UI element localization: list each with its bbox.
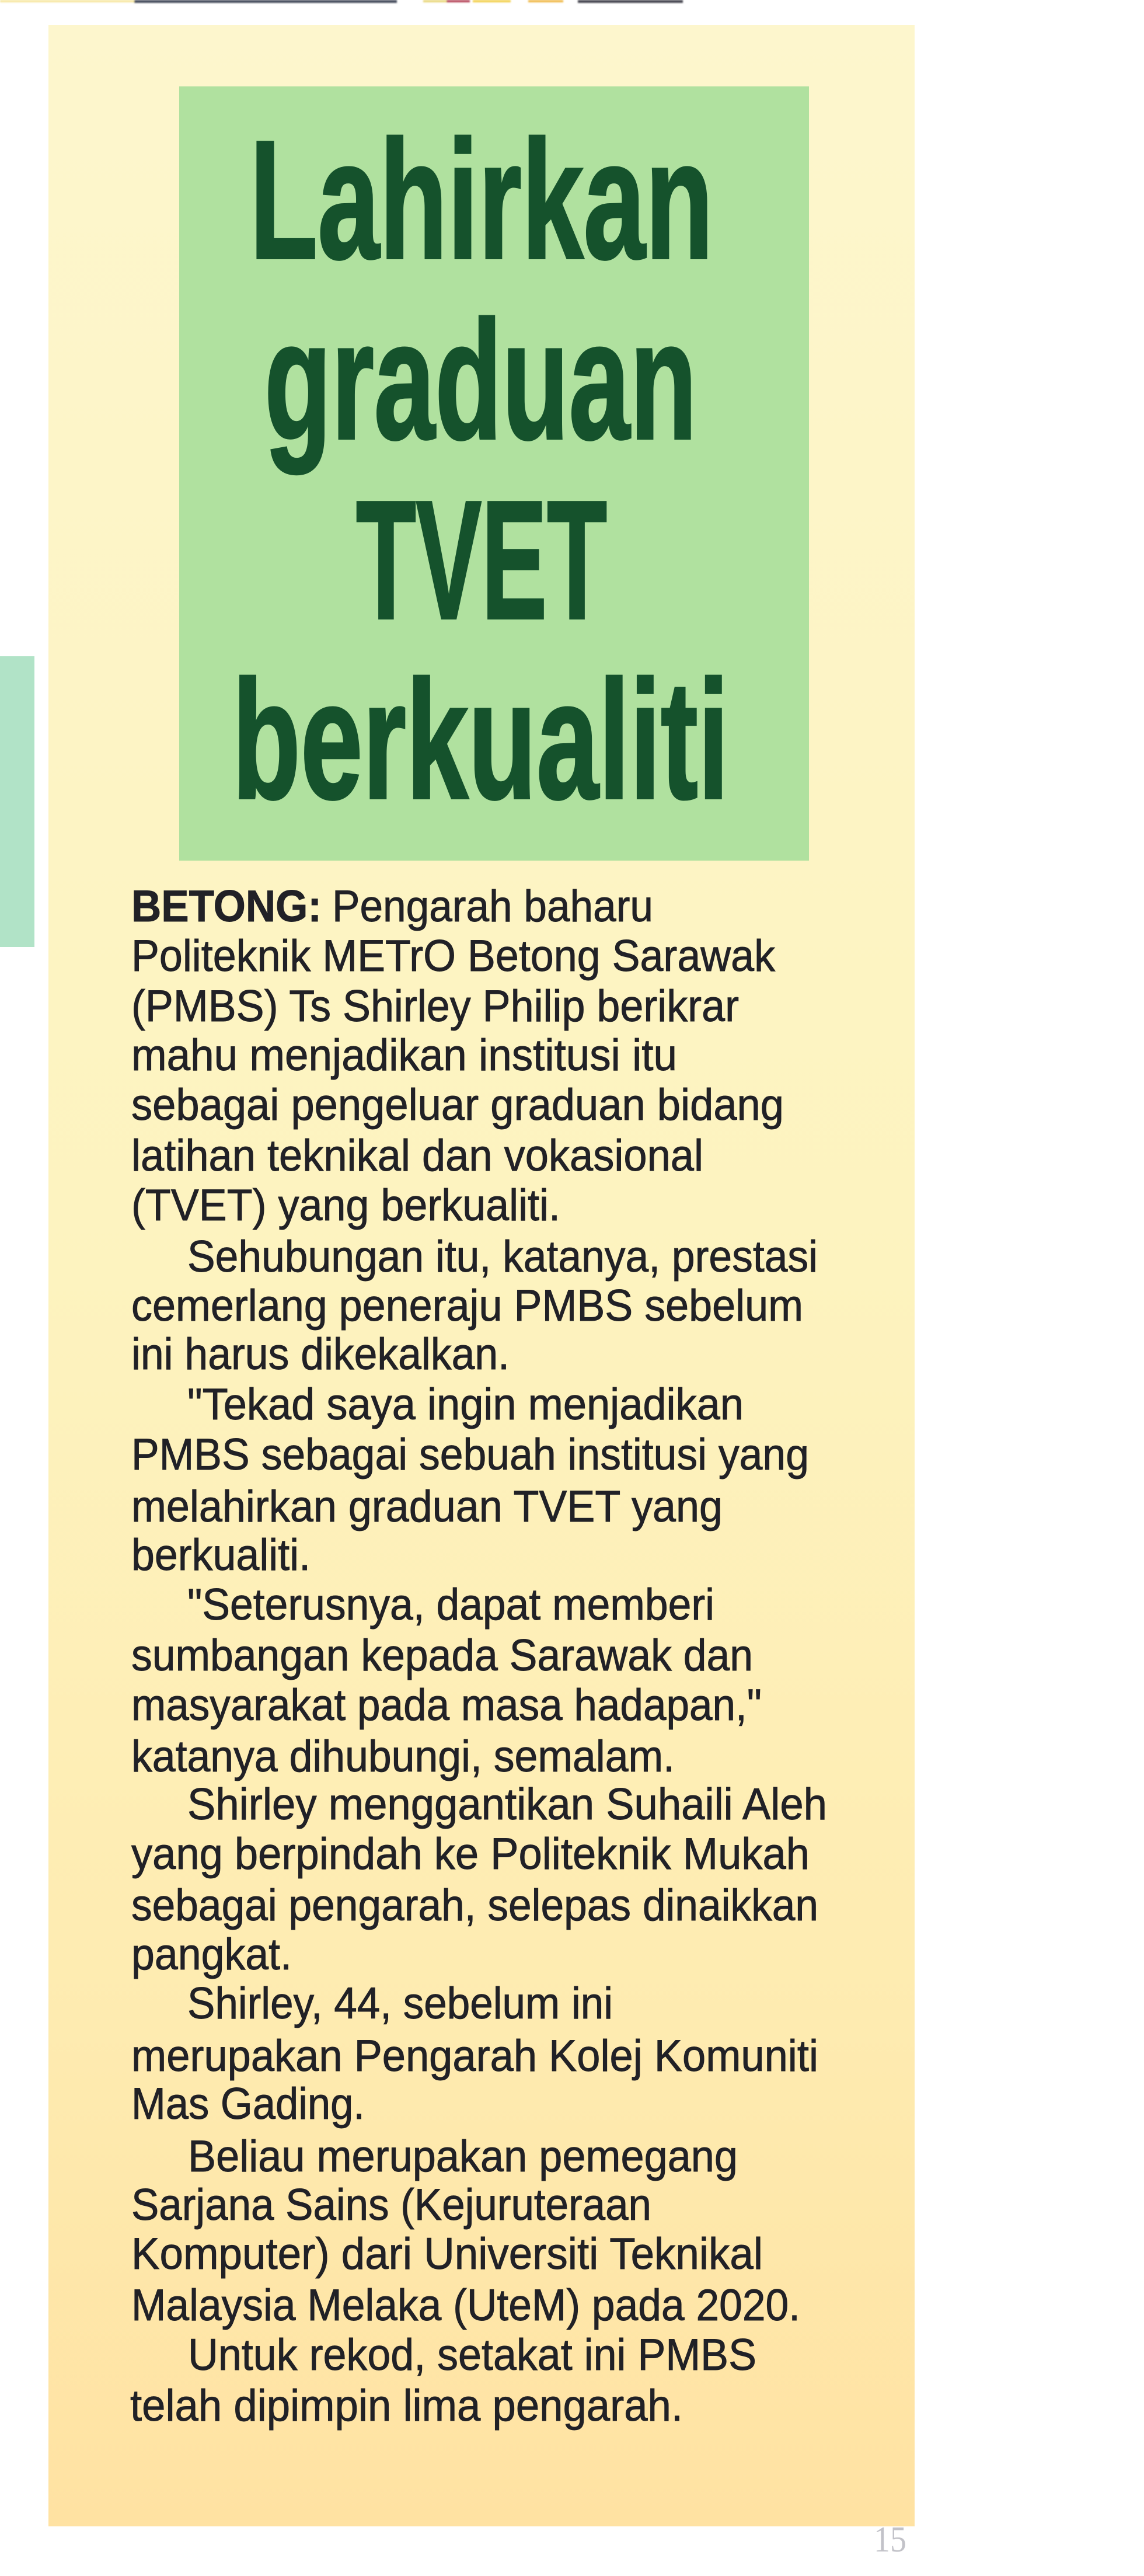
article body text: PMBS sebagai sebuah institusi yang — [131, 1430, 809, 1480]
headline: TVET — [356, 466, 607, 655]
headline: Lahirkan — [250, 106, 713, 294]
article body text: "Seterusnya, dapat memberi — [187, 1580, 714, 1630]
article body text: pangkat. — [131, 1930, 292, 1979]
article body text: merupakan Pengarah Kolej Komuniti — [131, 2031, 818, 2081]
article body text: sebagai pengeluar graduan bidang — [131, 1080, 784, 1130]
page number: 15 — [874, 2520, 906, 2560]
article panel — [48, 25, 915, 2526]
article body text: masyarakat pada masa hadapan," — [131, 1680, 762, 1730]
article body text: Mas Gading. — [131, 2079, 365, 2129]
article body text: Shirley, 44, sebelum ini — [187, 1979, 613, 2028]
article body text: yang berpindah ke Politeknik Mukah — [131, 1829, 810, 1879]
article body text: Shirley menggantikan Suhaili Aleh — [187, 1780, 827, 1829]
article body text: "Tekad saya ingin menjadikan — [187, 1380, 744, 1429]
article body text: Komputer) dari Universiti Teknikal — [131, 2229, 763, 2279]
article body text: Politeknik METrO Betong Sarawak — [131, 931, 776, 981]
article body text: latihan teknikal dan vokasional — [131, 1131, 703, 1181]
headline box — [179, 86, 809, 861]
headline: berkualiti — [232, 646, 729, 834]
article body text: BETONG: — [131, 882, 322, 931]
article body text: sebagai pengarah, selepas dinaikkan — [131, 1881, 818, 1930]
article body text: (PMBS) Ts Shirley Philip berikrar — [131, 981, 739, 1031]
left teal bar — [0, 656, 34, 947]
article body text: Pengarah baharu — [332, 882, 653, 931]
article body text: Beliau merupakan pemegang — [188, 2132, 738, 2181]
article body text: melahirkan graduan TVET yang — [131, 1482, 723, 1531]
article body text: Malaysia Melaka (UteM) pada 2020. — [131, 2281, 800, 2330]
top cropped strip — [0, 0, 683, 3]
article body text: sumbangan kepada Sarawak dan — [131, 1631, 753, 1680]
headline: graduan — [264, 286, 697, 475]
article body text — [130, 882, 827, 2431]
article body text: Sehubungan itu, katanya, prestasi — [187, 1232, 818, 1282]
article body text: (TVET) yang berkualiti. — [131, 1181, 560, 1230]
article body text: mahu menjadikan institusi itu — [131, 1031, 677, 1080]
article body text: ini harus dikekalkan. — [131, 1329, 510, 1379]
headline — [232, 106, 729, 834]
article body text: Untuk rekod, setakat ini PMBS — [188, 2330, 756, 2380]
article body text: Sarjana Sains (Kejuruteraan — [131, 2180, 651, 2230]
article body text: telah dipimpin lima pengarah. — [130, 2381, 683, 2431]
article body text: berkualiti. — [131, 1530, 311, 1580]
article body text: cemerlang peneraju PMBS sebelum — [131, 1281, 803, 1331]
article body text: katanya dihubungi, semalam. — [131, 1732, 675, 1781]
